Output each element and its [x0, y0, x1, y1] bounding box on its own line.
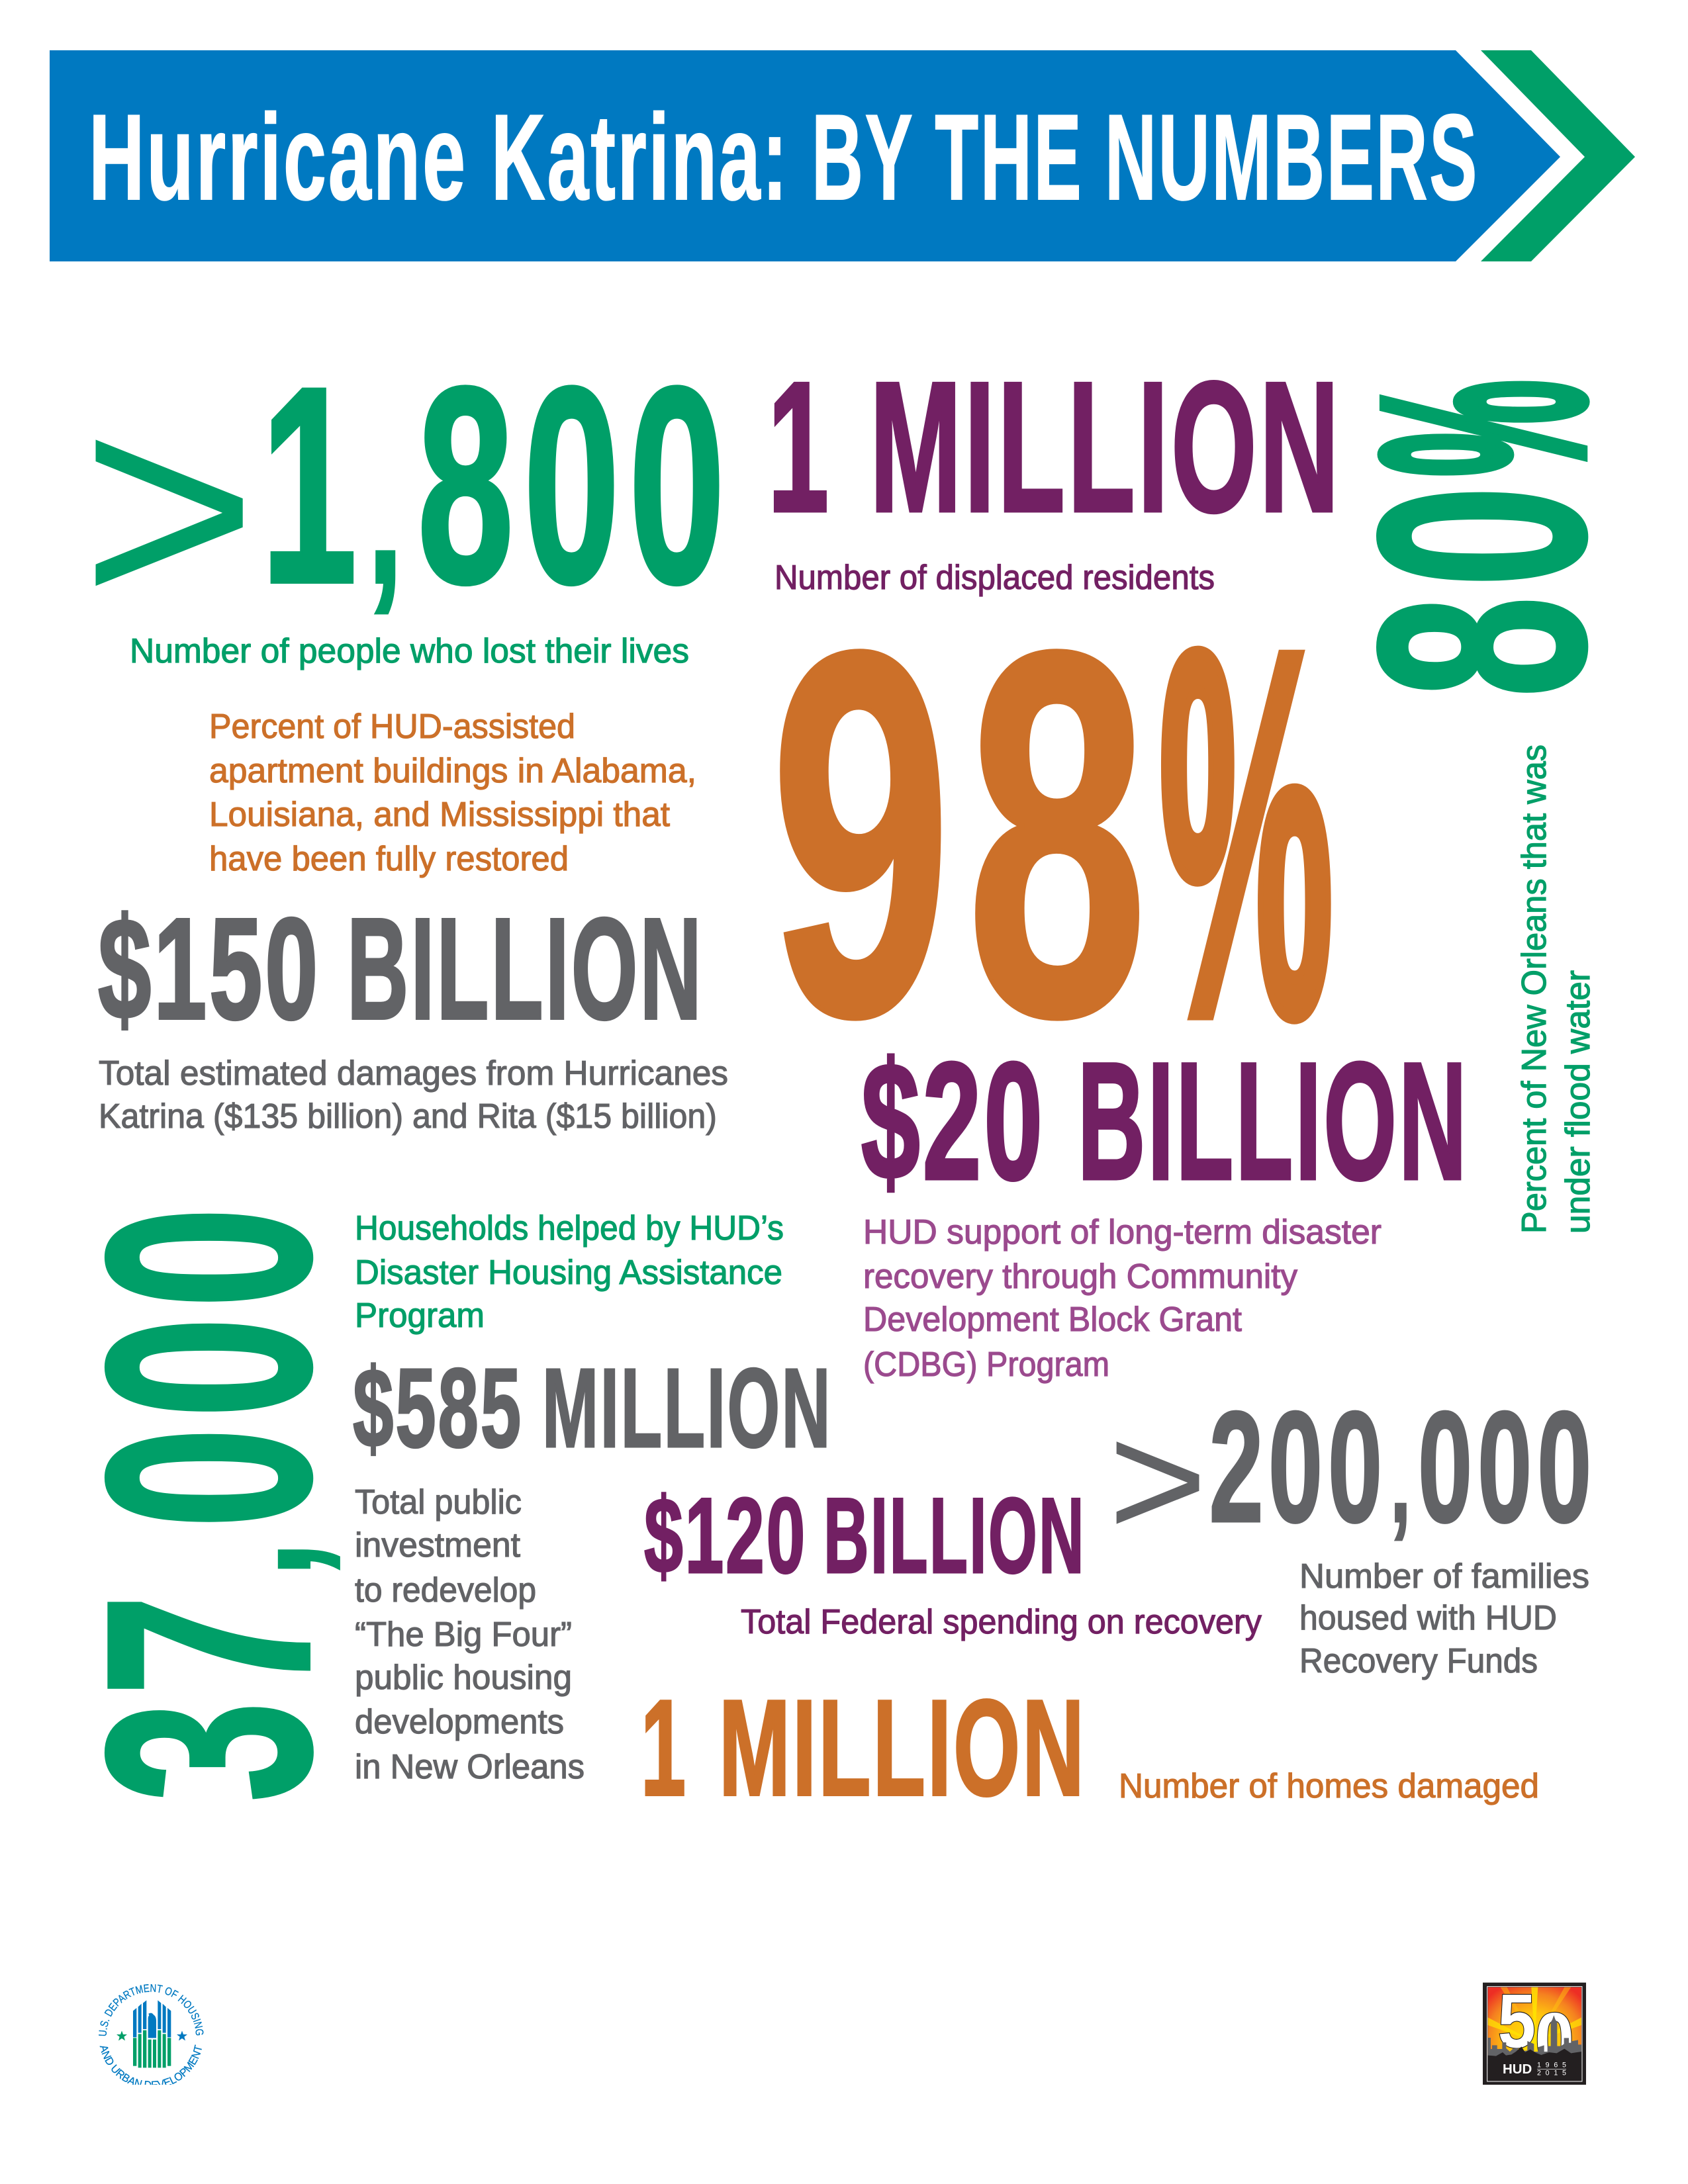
number: 37,000 (rotated): 0 [48, 1317, 371, 1418]
stat: restored apartment buildings [209, 544, 1333, 1124]
caption: HUD-assisted buildings: Percent of HUD-assisted [209, 707, 575, 746]
number: greater than 200,000: > [1108, 1389, 1207, 1570]
number: 98 percent: 8 [966, 544, 1148, 1123]
caption: families housed [1299, 1557, 1589, 1680]
caption: CDBG program: recovery through Community [863, 1257, 1297, 1296]
stat: families housed [1108, 1379, 1591, 1680]
number: 37,000 (rotated): , [135, 1543, 350, 1576]
seal text: top arc: U.S. DEPARTMENT OF HOUSING [99, 1984, 204, 2036]
caption: CDBG program: (CDBG) Program [863, 1345, 1109, 1384]
icon: green chevron [1481, 50, 1635, 261]
caption: flood water (rotated): Percent of New Orleans that was [1515, 745, 1554, 1234]
stat: displaced residents [768, 344, 1342, 597]
number: greater than 1,800: 0 [629, 330, 725, 641]
number: greater than 1,800: > [81, 347, 258, 669]
black skyline base [1488, 2046, 1581, 2081]
banner: blue arrow [50, 50, 1560, 261]
anniversary years: 2015 [1537, 2070, 1566, 2077]
stat: flooded New Orleans [1318, 381, 1646, 1234]
number: greater than 200,000: 2 [1209, 1379, 1264, 1556]
logo: HUD seal [99, 1984, 204, 2085]
number: 37,000 (rotated): 3 [48, 1702, 371, 1802]
anniversary years [1537, 2062, 1566, 2077]
stat: total damages [98, 889, 728, 1136]
numeral 50: 5 [1498, 1979, 1536, 2064]
caption: federal spending: Total Federal spending on recovery [741, 1603, 1262, 1641]
number: greater than 200,000 [1108, 1379, 1591, 1570]
caption: homes damaged: Number of homes damaged [1119, 1767, 1539, 1805]
number: 80 percent (rotated): % [1324, 381, 1642, 476]
number: greater than 1,800: 0 [524, 330, 620, 641]
caption: families housed: Number of families [1299, 1557, 1589, 1596]
number: greater than 1,800 [81, 330, 725, 669]
caption: Big Four redevelopment: investment [355, 1526, 521, 1565]
caption: CDBG program: HUD support of long-term disaster [863, 1213, 1382, 1251]
header banner [50, 50, 1635, 261]
seal: blue star [177, 2030, 187, 2040]
number: 1 million homes: 1 [641, 1672, 686, 1824]
number: greater than 1,800: 8 [418, 330, 514, 641]
caption: lives lost: Number of people who lost their lives [130, 632, 689, 670]
number: $150 billion: $150 [98, 889, 320, 1050]
title: Hurricane [89, 89, 467, 225]
seal: blue buildings and eagle [133, 2000, 171, 2038]
caption: disaster housing assistance: Program [355, 1297, 485, 1335]
stat: federal spending [644, 1476, 1262, 1641]
number: 1 million [768, 344, 1342, 551]
number: greater than 200,000: 0 [1328, 1379, 1382, 1556]
number: greater than 1,800: , [368, 402, 402, 624]
skyline [1488, 2015, 1581, 2064]
caption: Big Four redevelopment: public housing [355, 1659, 572, 1697]
number: 1 million: MILLION [870, 344, 1342, 551]
caption: Big Four redevelopment [355, 1483, 585, 1786]
caption: disaster housing assistance: Households helped by HUD’s [355, 1209, 784, 1248]
number: 98 percent [771, 544, 1333, 1124]
number: 80 percent (rotated): 0 [1318, 486, 1646, 587]
caption: Big Four redevelopment: in New Orleans [355, 1748, 585, 1786]
caption: estimated damages: Total estimated damages from Hurricanes [99, 1054, 728, 1093]
caption: CDBG program: Development Block Grant [863, 1300, 1243, 1339]
caption: families housed: Recovery Funds [1299, 1642, 1538, 1680]
number: greater than 200,000: 0 [1477, 1379, 1532, 1556]
number: $120 billion [644, 1476, 1086, 1596]
number: 1 million homes: MILLION [719, 1672, 1086, 1824]
number: $150 billion: BILLION [347, 889, 704, 1050]
stat: lives lost [81, 330, 725, 670]
numeral 50: 0 [1535, 1998, 1574, 2083]
caption: flood water (rotated): under flood water [1559, 970, 1597, 1234]
number: $120 billion: BILLION [823, 1476, 1086, 1596]
seal: green bars [133, 2030, 171, 2068]
numeral 50 [1498, 1979, 1574, 2083]
number: 80 percent (rotated) [1318, 381, 1646, 698]
title [89, 89, 1479, 225]
white crop [93, 2085, 212, 2098]
caption: flood water (rotated) [1515, 745, 1597, 1234]
title: Katrina: [491, 89, 789, 225]
number: $585 million: MILLION [542, 1345, 832, 1471]
caption: estimated damages [99, 1054, 728, 1136]
anniversary years: 1965 [1537, 2062, 1566, 2070]
number: 1 million homes [641, 1672, 1086, 1824]
caption: HUD-assisted buildings: apartment buildings in Alabama, [209, 752, 696, 790]
number: greater than 200,000: , [1390, 1414, 1411, 1547]
caption: Big Four redevelopment: “The Big Four” [355, 1615, 572, 1654]
caption: HUD-assisted buildings: Louisiana, and Mississippi that [209, 796, 671, 834]
number: greater than 200,000: 0 [1268, 1379, 1323, 1556]
number: 1 million: 1 [768, 344, 829, 551]
number: 98 percent: 9 [771, 544, 951, 1123]
number: $585 million [353, 1345, 832, 1471]
number: 37,000 (rotated): 7 [48, 1595, 371, 1695]
caption: Big Four redevelopment: developments [355, 1703, 564, 1741]
caption: Big Four redevelopment: to redevelop [355, 1571, 536, 1610]
caption: HUD-assisted buildings: have been fully restored [209, 840, 569, 878]
number: greater than 200,000: 0 [1418, 1379, 1472, 1556]
number: greater than 1,800: 1 [261, 330, 357, 641]
number: $585 million: $585 [353, 1345, 523, 1471]
number: 80 percent (rotated): 8 [1318, 596, 1646, 698]
caption: HUD-assisted buildings [209, 707, 696, 878]
HUD wordmark: HUD [1503, 2062, 1532, 2077]
number: 37,000 (rotated): 0 [48, 1207, 371, 1308]
black frame [1483, 1983, 1586, 2085]
caption: disaster housing assistance: Disaster Housing Assistance [355, 1253, 782, 1292]
seal text: bottom arc: AND URBAN DEVELOPMENT [99, 2044, 202, 2085]
stat: public investment [353, 1345, 832, 1786]
number: $120 billion: $120 [644, 1476, 807, 1596]
number: $20 billion [861, 1028, 1469, 1214]
caption: disaster housing assistance [355, 1209, 784, 1335]
stat: CDBG support [861, 1028, 1469, 1384]
number: 37,000 (rotated): 0 [48, 1428, 371, 1528]
number: $150 billion [98, 889, 704, 1050]
stat: households helped [48, 1207, 784, 1802]
caption: Big Four redevelopment: Total public [355, 1483, 522, 1522]
number: $20 billion: $20 [861, 1028, 1045, 1214]
number: greater than 200,000: 0 [1537, 1379, 1591, 1556]
caption: families housed: housed with HUD [1299, 1599, 1557, 1637]
seal: green star [117, 2030, 127, 2040]
caption: estimated damages: Katrina ($135 billion) and Rita ($15 billion) [99, 1097, 717, 1136]
sunburst [1488, 1987, 1581, 2058]
stat: homes damaged [641, 1672, 1539, 1824]
caption: CDBG program [863, 1213, 1382, 1384]
number: 98 percent: % [1159, 545, 1333, 1124]
caption: displaced residents: Number of displaced residents [774, 559, 1215, 597]
logo: HUD 50th anniversary [1483, 1979, 1586, 2085]
